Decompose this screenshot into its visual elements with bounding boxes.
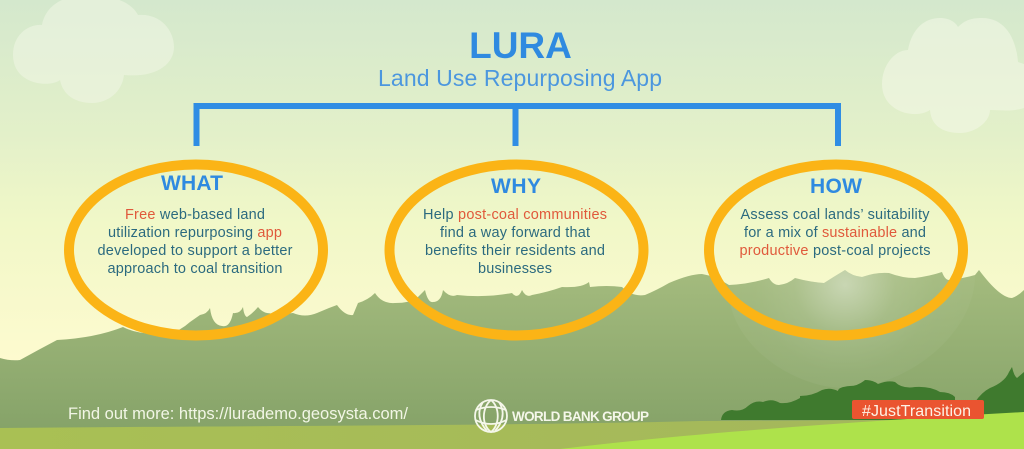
subtitle: Land Use Repurposing App bbox=[378, 65, 662, 91]
sun glow over hills bbox=[729, 270, 975, 388]
panel: what: utilization repurposing app bbox=[108, 225, 282, 241]
cloud: right bbox=[882, 18, 1024, 133]
panel: what bbox=[69, 164, 323, 336]
panel: how bbox=[709, 164, 963, 336]
panel: what: approach to coal transition bbox=[108, 261, 282, 277]
bushes bbox=[721, 367, 1024, 420]
panel: why: benefits their residents and bbox=[425, 243, 605, 259]
ground: olive band bbox=[0, 420, 900, 449]
link text: Find out more: https://lurademo.geosysta.com/ bbox=[68, 405, 408, 423]
panel: what: developed to support a better bbox=[98, 243, 293, 259]
panel: why: WHY bbox=[491, 175, 541, 198]
title: LURA bbox=[469, 25, 572, 66]
icon: world bank globe bbox=[475, 400, 507, 432]
panel: how: Assess coal lands’ suitability bbox=[740, 207, 930, 223]
panel: why: Help post-coal communities bbox=[423, 207, 607, 223]
ground: lime foreground bbox=[560, 412, 1024, 449]
panel: how: productive post-coal projects bbox=[740, 243, 930, 259]
hashtag badge: #JustTransition bbox=[862, 403, 971, 420]
panel: why bbox=[390, 164, 644, 336]
distant hills bbox=[0, 270, 1024, 449]
panel: why: businesses bbox=[478, 261, 552, 277]
panel: what: Free web-based land bbox=[125, 207, 265, 223]
panel: why: find a way forward that bbox=[440, 225, 590, 241]
bracket connector bbox=[196, 106, 838, 146]
panel: how: HOW bbox=[810, 175, 862, 198]
panel: how: for a mix of sustainable and bbox=[744, 225, 926, 241]
cloud: left bbox=[13, 0, 174, 103]
logo text: WORLD BANK GROUP bbox=[512, 409, 649, 424]
panel: what: WHAT bbox=[161, 172, 223, 195]
